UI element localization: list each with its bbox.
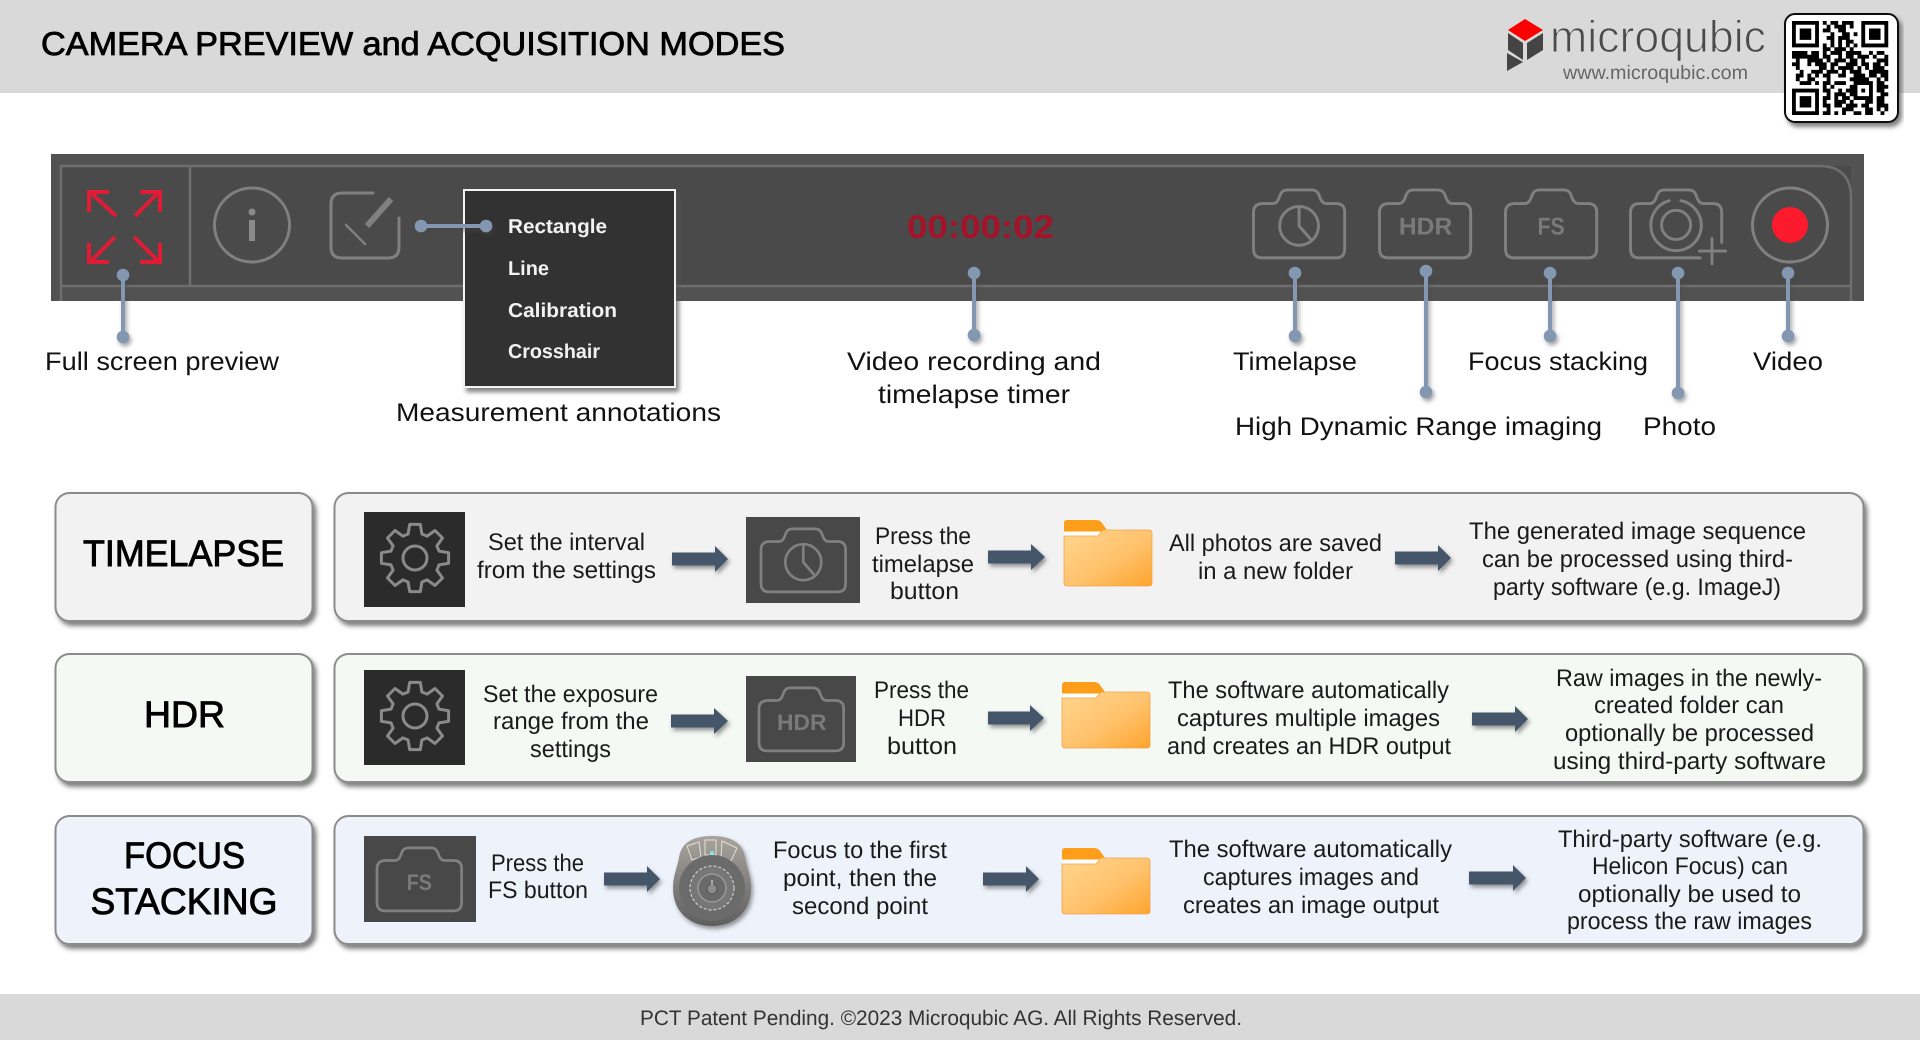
- text: automatic HDR capture: captures multiple images: [1177, 705, 1440, 732]
- connector: focus stacking: [1544, 267, 1556, 342]
- connector: photo: [1672, 267, 1684, 399]
- row: HDR: [56, 654, 1864, 782]
- text: set the exposure range: [483, 681, 658, 763]
- text: set the interval: [477, 529, 656, 584]
- text: automatic HDR capture: [1167, 677, 1451, 760]
- text: focus points: Focus to the first: [773, 837, 947, 864]
- icon: measurement annotation: [331, 193, 399, 258]
- connector: timer: [968, 267, 980, 341]
- title: CAMERA PREVIEW and ACQUISITION MODES: [41, 25, 785, 62]
- logo url: www.microqubic.com: [1562, 62, 1748, 84]
- text: press the timelapse button: button: [890, 578, 959, 605]
- menu item: crosshair: Crosshair: [508, 341, 600, 363]
- panel: timelapse heading: [56, 493, 312, 621]
- arrow: [671, 708, 728, 734]
- text: third party processing: Third-party software (e.g.: [1558, 826, 1822, 853]
- text: focus points: second point: [792, 893, 928, 920]
- text: set the interval: Set the interval: [488, 529, 645, 556]
- menu item: rectangle: Rectangle: [508, 216, 607, 238]
- text: automatic image capture: The software automatically: [1169, 836, 1452, 863]
- icon: info button: [214, 188, 290, 262]
- panel: HDR heading: HDR: [144, 694, 225, 735]
- icon: FS button: [364, 836, 476, 922]
- icon: HDR button: HDR: [777, 710, 827, 736]
- text: press the timelapse button: [872, 523, 974, 605]
- text: focus points: point, then the: [783, 865, 937, 892]
- text: raw images processing: [1553, 665, 1826, 775]
- panel: focus stacking heading: STACKING: [90, 881, 278, 922]
- icon: settings gear: [364, 670, 465, 765]
- text: image sequence processing: The generated image sequence: [1469, 518, 1806, 545]
- text: photos saved: in a new folder: [1198, 558, 1353, 585]
- icon: focus stacking camera: [1506, 190, 1597, 258]
- panel: HDR heading: [56, 654, 312, 782]
- text: raw images processing: Raw images in the newly-: [1556, 665, 1822, 692]
- text: image sequence processing: can be processed using third-: [1482, 546, 1793, 573]
- text: press the HDR button: [874, 677, 969, 760]
- arrow: [983, 866, 1039, 892]
- arrow: [672, 546, 728, 572]
- icon: focus stacking camera: FS: [1538, 213, 1565, 240]
- menu item: line: Line: [508, 258, 549, 280]
- text: automatic HDR capture: The software automatically: [1168, 677, 1449, 704]
- icon: settings gear: [364, 512, 465, 607]
- connector: video: [1782, 267, 1794, 342]
- label: full screen preview: Full screen preview: [45, 348, 280, 376]
- icon: timelapse button: [746, 517, 860, 603]
- text: press the FS button: FS button: [488, 877, 588, 904]
- icon: folder: [1062, 682, 1150, 748]
- text: photos saved: All photos are saved: [1169, 530, 1382, 557]
- label: timelapse: Timelapse: [1233, 348, 1357, 376]
- panel: timelapse steps: [334, 493, 1864, 621]
- text: press the timelapse button: timelapse: [872, 551, 974, 578]
- arrow: [1469, 865, 1526, 891]
- text: set the exposure range: settings: [530, 736, 611, 763]
- label: video recording timer: timelapse timer: [878, 381, 1071, 409]
- connector: HDR: [1420, 265, 1432, 398]
- text: third party processing: [1558, 826, 1822, 935]
- panel: HDR steps: [334, 654, 1864, 782]
- icon: focus controller: [673, 836, 751, 926]
- text: set the exposure range: range from the: [493, 708, 649, 735]
- footer text: PCT Patent Pending. ©2023 Microqubic AG. All Rights Reserved.: [640, 1007, 1242, 1030]
- icon: folder: [1062, 848, 1150, 914]
- QR code: [1785, 14, 1898, 122]
- panel: focus stacking heading: [56, 816, 312, 944]
- label: focus stacking: Focus stacking: [1468, 348, 1648, 376]
- icon: folder: [1064, 520, 1152, 586]
- panel: focus stacking heading: FOCUS: [124, 835, 245, 876]
- icon: full screen arrows: [89, 191, 160, 263]
- text: set the exposure range: Set the exposure: [483, 681, 658, 708]
- arrow: [1395, 545, 1451, 571]
- icon: photo camera: [1630, 190, 1726, 264]
- text: third party processing: process the raw images: [1567, 908, 1812, 935]
- text: press the FS button: [488, 850, 588, 904]
- camera toolbar: [51, 154, 1864, 301]
- annotation dropdown menu: [464, 190, 675, 387]
- text: press the HDR button: Press the: [874, 677, 969, 704]
- header band: [0, 0, 1920, 93]
- icon: FS button: FS: [407, 870, 432, 896]
- text: focus points: [773, 837, 947, 920]
- icon: timelapse camera: [1254, 190, 1345, 258]
- text: third party processing: optionally be used to: [1578, 881, 1801, 908]
- text: raw images processing: optionally be processed: [1565, 720, 1814, 747]
- label: video: Video: [1753, 348, 1823, 376]
- text: raw images processing: created folder can: [1594, 692, 1784, 719]
- text: automatic HDR capture: and creates an HDR output: [1167, 733, 1451, 760]
- text: press the timelapse button: Press the: [875, 523, 971, 550]
- footer band: [0, 994, 1920, 1040]
- arrow: [1472, 706, 1528, 732]
- label: measurement annotations: Measurement annotations: [396, 399, 721, 427]
- icon: HDR camera: HDR: [1399, 213, 1452, 240]
- arrow: [988, 544, 1045, 570]
- timer readout: 00:00:02: [907, 208, 1054, 245]
- label: high dynamic range: High Dynamic Range imaging: [1235, 413, 1602, 441]
- text: third party processing: Helicon Focus) can: [1592, 853, 1788, 880]
- text: automatic image capture: creates an image output: [1183, 892, 1439, 919]
- text: press the FS button: Press the: [491, 850, 584, 877]
- label: video recording timer: [847, 348, 1101, 409]
- text: press the HDR button: button: [887, 733, 957, 760]
- text: raw images processing: using third-party software: [1553, 748, 1826, 775]
- menu item: calibration: Calibration: [508, 300, 617, 322]
- panel: timelapse heading: TIMELAPSE: [83, 533, 284, 574]
- icon: cube: [1507, 19, 1543, 71]
- connector: full screen preview: [117, 269, 129, 343]
- row: timelapse: [56, 493, 1864, 621]
- row: focus stacking: [56, 816, 1864, 944]
- label: photo: Photo: [1643, 413, 1716, 441]
- logo: microqubic: [1507, 11, 1766, 84]
- text: image sequence processing: [1469, 518, 1806, 601]
- label: video recording timer: Video recording and: [847, 348, 1101, 376]
- text: set the interval: from the settings: [477, 557, 656, 584]
- text: image sequence processing: party software (e.g. ImageJ): [1493, 574, 1781, 601]
- text: press the HDR button: HDR: [898, 705, 946, 732]
- icon: HDR camera: [1380, 190, 1471, 258]
- connector: measurement menu: [415, 220, 492, 232]
- connector: timelapse: [1289, 267, 1301, 342]
- icon: record button: [1752, 188, 1828, 262]
- text: automatic image capture: [1169, 836, 1452, 919]
- panel: focus stacking steps: [334, 816, 1864, 944]
- logo wordmark: microqubic: [1550, 11, 1766, 62]
- text: automatic image capture: captures images and: [1203, 864, 1419, 891]
- arrow: [604, 866, 660, 892]
- arrow: [988, 705, 1044, 731]
- text: photos saved: [1169, 530, 1382, 585]
- icon: HDR button: [746, 676, 856, 762]
